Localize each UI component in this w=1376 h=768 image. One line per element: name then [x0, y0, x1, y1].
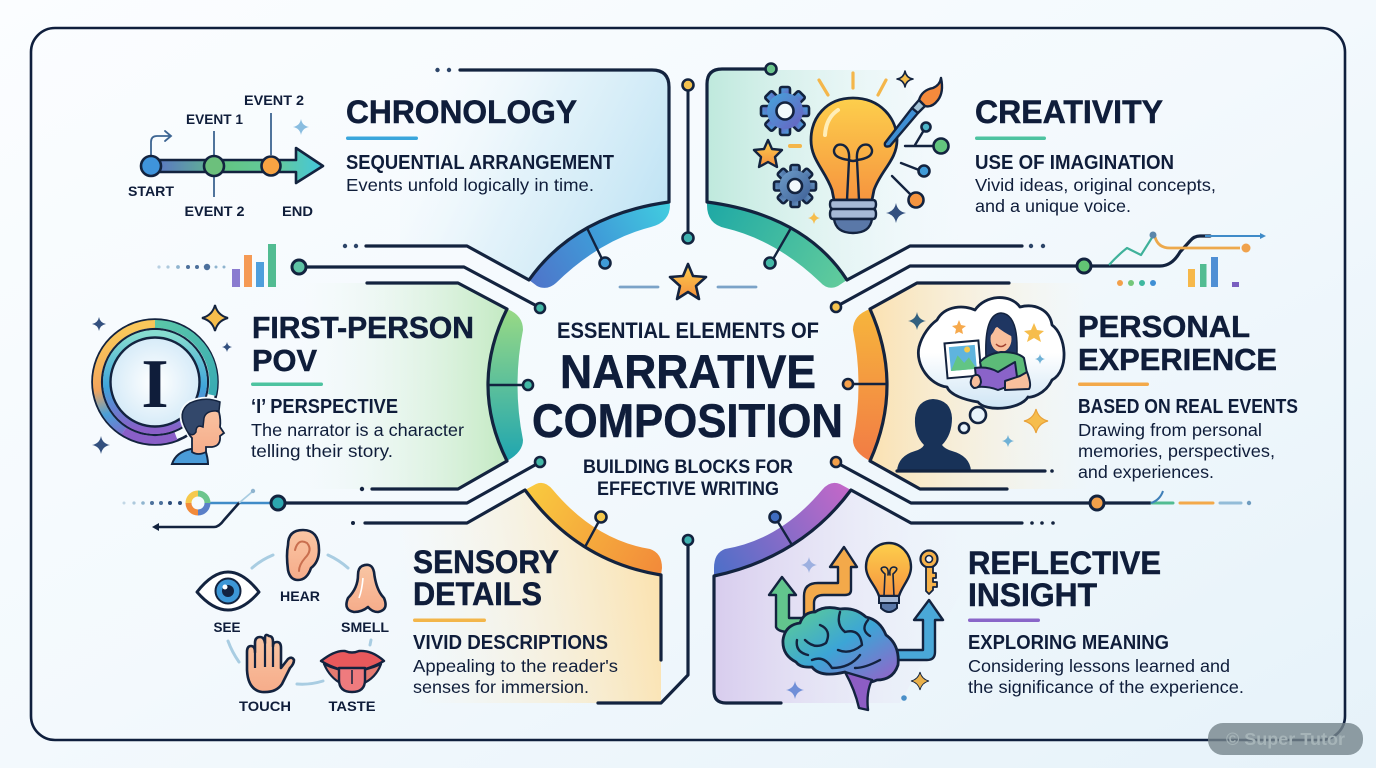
- connector: upper left with chart: [157, 244, 545, 313]
- timeline labels: [128, 92, 313, 219]
- reflective subheading: EXPLORING MEANING: [968, 632, 1169, 654]
- woman smile: [996, 344, 1006, 346]
- creativity arc band: [707, 202, 847, 288]
- subtitle: EFFECTIVE WRITING: [597, 479, 779, 500]
- gear small: [774, 165, 816, 207]
- icon: hand: [247, 635, 294, 692]
- inner node: [535, 457, 545, 467]
- personal outline: [870, 283, 1009, 489]
- personal heading: [1078, 309, 1277, 377]
- icon: brain with arrows: [769, 543, 943, 710]
- timeline labels: START: [128, 183, 174, 199]
- sensory heading: DETAILS: [413, 576, 542, 612]
- reflective heading: [968, 545, 1161, 613]
- sensory arc band: [525, 483, 662, 575]
- connector line: [841, 465, 1150, 503]
- watermark: [1208, 723, 1363, 755]
- orange dot: [1242, 244, 1250, 252]
- cloud stars: [952, 320, 966, 334]
- sensory heading: [413, 544, 559, 612]
- timeline nodes: [141, 156, 280, 176]
- sparkline orange: [1155, 237, 1240, 248]
- first-person subheading: ‘I’ PERSPECTIVE: [251, 396, 398, 418]
- icon: creativity lightbulb: [754, 71, 948, 233]
- bulb: [866, 543, 911, 612]
- small star: [754, 140, 782, 167]
- mini bar chart: [232, 244, 276, 287]
- personal heading: EXPERIENCE: [1078, 342, 1277, 377]
- nodes: [892, 122, 948, 208]
- chronology subheading: SEQUENTIAL ARRANGEMENT: [346, 152, 614, 174]
- panel: first-person pov: [92, 283, 533, 491]
- sensory body: Appealing to the reader's: [413, 656, 618, 676]
- label: taste: TASTE: [328, 698, 376, 714]
- reflective heading: REFLECTIVE: [968, 545, 1161, 581]
- reflective body: Considering lessons learned and: [968, 656, 1230, 676]
- coloured dashes: [1152, 502, 1241, 504]
- middle edge: [102, 329, 208, 435]
- chronology underline: [346, 136, 418, 140]
- silhouette: [897, 399, 971, 471]
- icon: nose: [346, 565, 386, 612]
- sparkline green: [1109, 236, 1153, 265]
- sparkles: [92, 317, 106, 331]
- creativity node: [766, 64, 776, 74]
- first-person connector: [488, 380, 533, 390]
- connector: bottom vertical: [598, 535, 693, 703]
- watermark: © Super Tutor: [1226, 729, 1345, 749]
- cloud: [918, 298, 1064, 408]
- tail dot: [1247, 501, 1251, 505]
- sensory trailing dot: [351, 521, 355, 525]
- outer ring band: purple base: [124, 431, 176, 440]
- sensory body: [413, 656, 618, 697]
- reflective heading: INSIGHT: [968, 577, 1097, 613]
- connector line: [841, 236, 1210, 304]
- chronology trailing dots: [343, 68, 451, 248]
- woman face: [990, 326, 1012, 352]
- creativity body: [975, 175, 1216, 216]
- label: touch: TOUCH: [239, 698, 291, 714]
- tail curve: [1151, 491, 1163, 503]
- person profile: [172, 399, 224, 464]
- donut icon: [188, 494, 208, 512]
- subtitle: [583, 457, 793, 500]
- chronology outline: [366, 70, 669, 280]
- woman fringe: [989, 320, 1013, 337]
- personal connector: [843, 379, 887, 389]
- dotted trail: [157, 264, 226, 270]
- personal arc band: [853, 309, 887, 461]
- blue arrow tip: [1260, 233, 1266, 239]
- connector: upper right with sparkline: [831, 232, 1266, 312]
- reflective arc band: [714, 483, 851, 576]
- sensory underline: [413, 618, 486, 622]
- mini dots: [1117, 280, 1156, 286]
- brain: [783, 608, 898, 682]
- panel: creativity: [707, 64, 1216, 288]
- label: hear: HEAR: [280, 588, 320, 604]
- first-person trailing dot: [360, 487, 364, 491]
- connector line: [306, 267, 535, 305]
- reflective underline: [968, 618, 1040, 622]
- first-person panel fill: [300, 283, 507, 489]
- reflective body: the significance of the experience.: [968, 677, 1244, 697]
- chronology arc band: [529, 202, 670, 288]
- outer ring edge: [92, 320, 218, 444]
- icon group: five senses: [197, 530, 389, 714]
- inner disc edge: [110, 338, 200, 426]
- sparkline node: [1150, 232, 1156, 238]
- timeline sparkle: [293, 119, 309, 135]
- creativity heading: CREATIVITY: [975, 94, 1163, 130]
- sensory subheading: VIVID DESCRIPTIONS: [413, 632, 608, 654]
- rays: [819, 73, 886, 95]
- bulb filament: [834, 145, 872, 200]
- brain stem: [845, 672, 872, 710]
- panel: personal experience: [843, 283, 1298, 489]
- silhouette base line: [897, 469, 1054, 473]
- icon: memory thought cloud: [897, 298, 1064, 473]
- reflective panel fill: [714, 490, 1000, 703]
- reflective trailing dots: [1030, 521, 1055, 525]
- connector line: [284, 465, 535, 503]
- reflective body: [968, 656, 1244, 697]
- paintbrush: [885, 78, 942, 147]
- brain folds: [797, 612, 880, 668]
- green arrow: [769, 577, 815, 632]
- panel: sensory details: [197, 483, 662, 714]
- chronology connector: [587, 228, 610, 268]
- icon: timeline: [128, 92, 323, 219]
- timeline arrow: [151, 148, 323, 183]
- timeline labels: EVENT 2: [184, 203, 245, 219]
- bulb highlight: [825, 110, 838, 135]
- reflective connector: [770, 512, 792, 545]
- sparkle gold small: [808, 212, 820, 224]
- title main: composition: COMPOSITION: [532, 394, 843, 447]
- reflective outline: [714, 490, 1022, 703]
- outer ring band: teal side: [155, 324, 213, 395]
- letter I: I: [141, 346, 169, 423]
- personal body: memories, perspectives,: [1078, 441, 1275, 461]
- thin segment: [208, 502, 272, 504]
- personal subheading: BASED ON REAL EVENTS: [1078, 396, 1298, 418]
- creativity subheading: USE OF IMAGINATION: [975, 152, 1174, 174]
- creativity body: and a unique voice.: [975, 196, 1131, 216]
- sparkle gold: [897, 71, 913, 87]
- sensory connector: [585, 512, 606, 547]
- dotted trail: [122, 501, 182, 505]
- book: [975, 362, 1018, 390]
- connector: lower left with donut: [122, 457, 545, 531]
- timeline labels: EVENT 2: [244, 92, 304, 108]
- icon: lips and tongue: [321, 651, 384, 692]
- star: [670, 264, 706, 299]
- first-person body: telling their story.: [251, 441, 393, 461]
- right node: [1090, 496, 1104, 510]
- outer ring band: warm side: [97, 324, 155, 431]
- sense ring arcs: [228, 555, 371, 684]
- label: smell: SMELL: [341, 619, 389, 635]
- first-person body: [251, 420, 464, 461]
- chronology panel fill: [400, 70, 669, 280]
- first-person heading: FIRST-PERSON: [252, 310, 474, 345]
- creativity trailing dots: [1029, 244, 1045, 248]
- inner node: [831, 457, 841, 467]
- inner node: [535, 303, 545, 313]
- panel: chronology: [128, 68, 670, 288]
- bulb glass: [811, 98, 897, 200]
- inner node: [831, 302, 841, 312]
- sensory outline: [365, 490, 661, 660]
- icon: eye: [197, 572, 259, 610]
- sensory body: senses for immersion.: [413, 677, 589, 697]
- personal panel fill: [870, 283, 1090, 489]
- personal heading: PERSONAL: [1078, 309, 1250, 344]
- connector: top vertical: [682, 80, 694, 244]
- personal body: [1078, 420, 1275, 482]
- right node: [1077, 259, 1091, 273]
- blue arrow: [880, 600, 943, 660]
- blue arrow line: [1205, 235, 1260, 237]
- woman hair: [986, 313, 1017, 362]
- orange arrow: [804, 547, 857, 620]
- woman shirt: [980, 352, 1027, 386]
- photo frame: [944, 340, 981, 378]
- chronology body: Events unfold logically in time.: [346, 175, 594, 195]
- chronology heading: CHRONOLOGY: [346, 94, 577, 130]
- first-person heading: POV: [252, 343, 317, 378]
- personal body: Drawing from personal: [1078, 420, 1262, 440]
- connector: lower right with dashes: [831, 457, 1251, 510]
- return arrow: [152, 489, 255, 531]
- first-person underline: [251, 382, 323, 386]
- key: [920, 550, 938, 594]
- left node: [271, 496, 285, 510]
- title main: narrative: NARRATIVE: [560, 345, 816, 398]
- sparkles: [908, 312, 926, 330]
- thought bubbles: [970, 407, 986, 423]
- timeline labels: EVENT 1: [186, 111, 243, 127]
- creativity connector: [764, 228, 791, 268]
- personal body: and experiences.: [1078, 462, 1214, 482]
- creativity underline: [975, 136, 1046, 140]
- subtitle: BUILDING BLOCKS FOR: [583, 457, 793, 478]
- sensory panel fill: [400, 490, 661, 703]
- label: see: SEE: [214, 619, 240, 635]
- timeline event stems: [214, 113, 271, 197]
- timeline start arrow: [151, 131, 171, 155]
- star dashes: [620, 286, 756, 288]
- icon: ear: [287, 530, 319, 580]
- first-person heading: [252, 310, 474, 378]
- first-person arc band: [488, 309, 523, 461]
- inner ring band: [106, 334, 204, 430]
- first-person outline: [367, 283, 507, 489]
- left node: [292, 260, 306, 274]
- title line one: ESSENTIAL ELEMENTS OF: [557, 318, 819, 343]
- centre title block: [532, 264, 843, 500]
- panel: reflective insight: [714, 483, 1244, 710]
- dash: [788, 144, 802, 148]
- mini bars: [1188, 257, 1239, 287]
- first-person body: The narrator is a character: [251, 420, 464, 440]
- hands: [971, 372, 1030, 390]
- gear large: [761, 87, 809, 135]
- sparkles: [801, 557, 817, 573]
- bulb base: [830, 200, 876, 233]
- timeline labels: END: [282, 203, 313, 219]
- creativity body: Vivid ideas, original concepts,: [975, 175, 1216, 195]
- sensory heading: SENSORY: [413, 544, 559, 580]
- icon: first-person ring: [92, 305, 232, 464]
- creativity outline: [707, 69, 1022, 280]
- sparkle navy: [886, 203, 906, 223]
- personal underline: [1078, 382, 1149, 386]
- creativity panel fill: [707, 70, 1000, 280]
